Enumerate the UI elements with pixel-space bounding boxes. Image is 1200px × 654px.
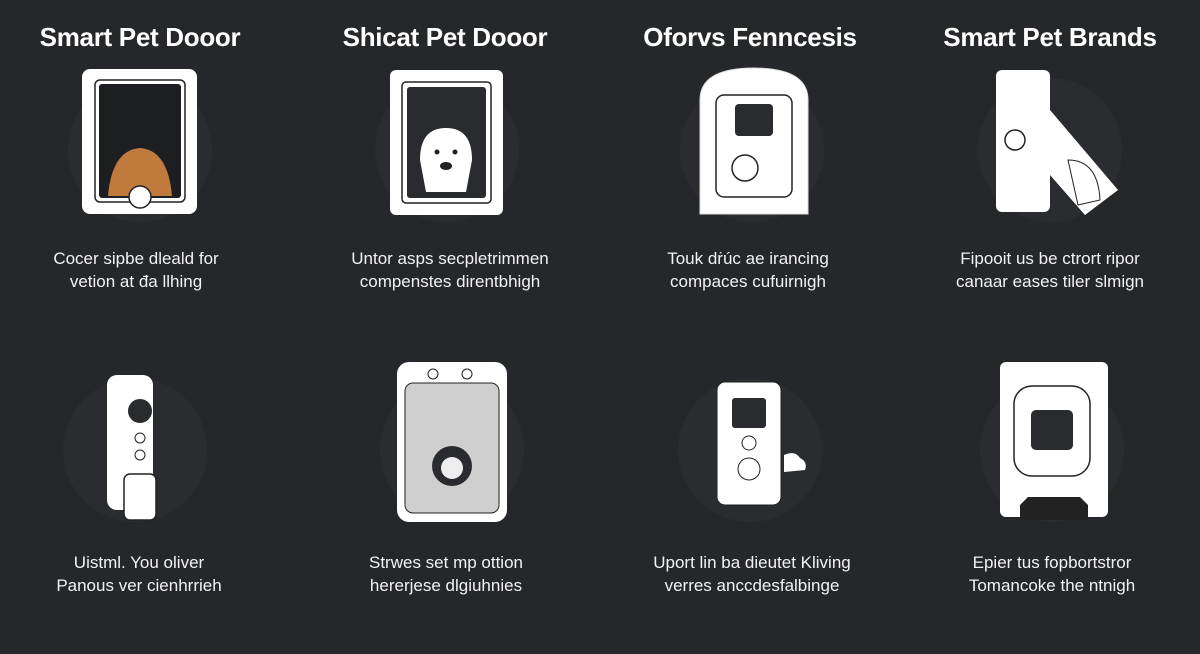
text: row 1 col 1: vetion at đa llhing	[70, 272, 202, 291]
text: row 2 col 1: Panous ver cienhrrieh	[56, 576, 222, 595]
text: row 2 col 1	[56, 553, 222, 595]
text: row 2 col 4: Epier tus fopbortstror	[973, 553, 1131, 572]
text: row 1 col 2: compenstes direntbhigh	[360, 272, 540, 291]
icon: grey door with cat	[397, 362, 507, 522]
text: row 2 col 1: Uistml. You oliver	[74, 553, 204, 572]
text: row 1 col 2	[351, 249, 549, 291]
title: Shicat Pet Dooor: Shicat Pet Dooor	[343, 22, 547, 52]
text: row 1 col 4	[956, 249, 1144, 291]
icon: wall door with flap	[996, 70, 1118, 215]
text: row 1 col 3	[667, 249, 829, 291]
text: row 2 col 3: verres anccdesfalbinge	[665, 576, 839, 595]
text: row 1 col 2: Untor asps secpletrimmen	[351, 249, 549, 268]
text: row 2 col 4	[969, 553, 1135, 595]
icon: pet door with orange dog	[82, 69, 197, 214]
text: row 1 col 4: Fipooit us be ctrort ripor	[960, 249, 1140, 268]
icon: panel with mount	[1000, 362, 1108, 520]
icon: tall remote	[107, 375, 156, 520]
title: Oforvs Fenncesis: Oforvs Fenncesis	[643, 22, 857, 52]
text: row 2 col 2: Strwes set mp ottion	[369, 553, 523, 572]
text: row 2 col 3	[653, 553, 851, 595]
title: Smart Pet Brands: Smart Pet Brands	[943, 22, 1157, 52]
text: row 1 col 3: compaces cufuirnigh	[670, 272, 826, 291]
text: row 2 col 2: hererjese dlgiuhnies	[370, 576, 522, 595]
text: row 2 col 2	[369, 553, 523, 595]
text: row 1 col 1: Cocer sipbe dleald for	[53, 249, 219, 268]
icon: pet door with dog face	[390, 70, 503, 215]
icon: house shaped keypad	[700, 68, 808, 214]
title: Smart Pet Dooor: Smart Pet Dooor	[40, 22, 240, 52]
text: row 1 col 3: Touk dṙúc ae irancing	[667, 249, 829, 268]
icon: keypad with cloud	[717, 382, 806, 505]
text: row 2 col 4: Tomancoke the ntnigh	[969, 576, 1135, 595]
text: row 1 col 4: canaar eases tiler slmign	[956, 272, 1144, 291]
text: row 1 col 1	[53, 249, 219, 291]
text: row 2 col 3: Uport lin ba dieutet Kliving	[653, 553, 851, 572]
